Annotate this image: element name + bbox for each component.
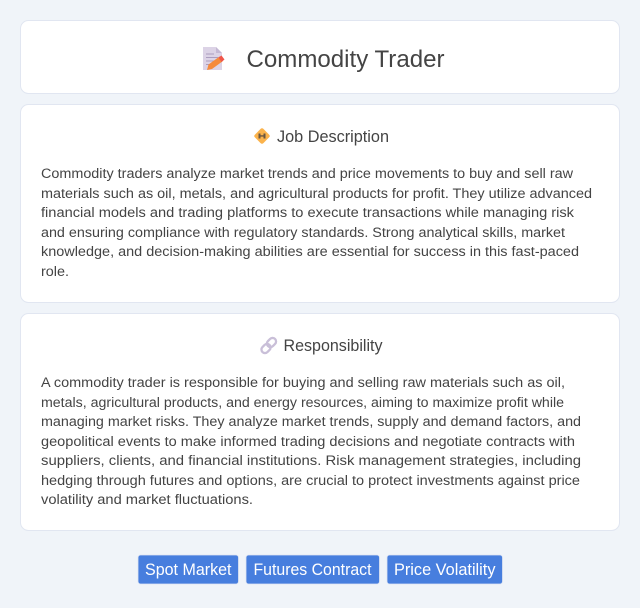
tag: price volatility [387, 555, 502, 584]
text block: job description: Commodity traders analyze market trends and price movements to buy and sell raw [41, 166, 574, 182]
text block: responsibility: geopolitical events to make informed trading decisions and negotiate contracts with [41, 434, 575, 450]
heading: job description: Job Description [277, 128, 389, 146]
text block: responsibility [41, 375, 581, 508]
title: Commodity Trader [246, 46, 445, 73]
text block: job description: knowledge, and decision-making abilities are essential for success in this fast-paced [41, 244, 579, 260]
text block: responsibility: suppliers, clients, and financial institutions. Risk management strategies, including [41, 453, 581, 469]
tag: spot market [138, 555, 238, 584]
tag: price volatility: Price Volatility [394, 561, 496, 579]
heading: responsibility: Responsibility [284, 337, 383, 355]
icon: document with pencil [203, 47, 224, 70]
text block: responsibility: volatility and market fluctuations. [41, 492, 253, 508]
text block: job description: financial models and trading platforms to execute transactions while managing risk [41, 205, 575, 221]
text block: job description [41, 166, 592, 280]
text block: job description: materials such as oil, metals, and agricultural products for profit. They utilize advanced [41, 186, 592, 202]
icon: chain link [260, 336, 278, 355]
text block: responsibility: hedging through futures and options, are crucial to protect investments against price [41, 473, 580, 489]
text block: responsibility: metals, agricultural products, and energy resources, aiming to maximize profit while [41, 395, 564, 411]
tag: spot market: Spot Market [145, 561, 232, 579]
icon: orange diamond [254, 128, 270, 144]
panel: responsibility [20, 314, 620, 530]
tag: futures contract [246, 555, 380, 584]
text block: responsibility: managing market risks. They analyze market trends, supply and demand factors, and [41, 414, 581, 430]
panel: job description [20, 104, 620, 302]
text block: job description: and ensuring compliance with regulatory standards. Strong analytical skills, market [41, 225, 565, 241]
text block: job description: role. [41, 264, 69, 280]
panel: title card [20, 20, 620, 94]
text block: responsibility: A commodity trader is responsible for buying and selling raw materials such as oil, [41, 375, 565, 391]
tag: futures contract: Futures Contract [254, 561, 372, 579]
